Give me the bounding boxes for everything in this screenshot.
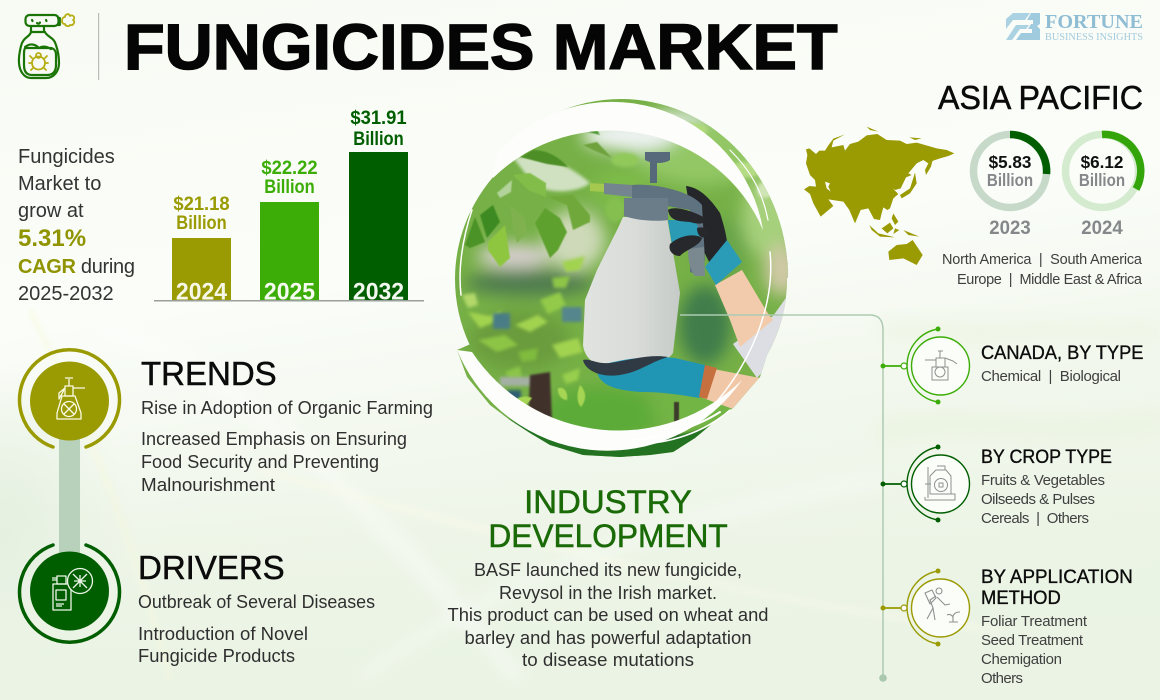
segment text: by application method: BY APPLICATION bbox=[981, 567, 1133, 588]
bar 2024: Billion bbox=[176, 212, 227, 233]
sleeve bbox=[733, 295, 788, 378]
bar 2024: $21.18 bbox=[173, 193, 230, 214]
dark blue background patches bbox=[493, 307, 582, 404]
CAGR text block: 5.31% bbox=[18, 225, 86, 252]
segment icon: by application method bbox=[880, 568, 970, 646]
segment icon: by type bbox=[880, 326, 970, 404]
donut: 2023: $5.83 bbox=[989, 152, 1032, 172]
icon: trends circle bbox=[19, 350, 119, 447]
section: drivers: DRIVERS bbox=[138, 549, 285, 586]
CAGR text block: Market to bbox=[18, 173, 101, 195]
bar 2032 bbox=[349, 107, 408, 305]
section: industry development bbox=[448, 484, 768, 670]
logo: Fortune Business Insights: BUSINESS INSIGHTS bbox=[1045, 32, 1143, 43]
section: drivers: Introduction of Novel bbox=[138, 624, 308, 644]
lower glove bbox=[597, 357, 705, 398]
segment text: by application method: Others bbox=[981, 670, 1023, 687]
bottle bbox=[583, 217, 680, 364]
segment text: by type: Chemical | Biological bbox=[981, 368, 1121, 385]
CAGR text block: CAGR during bbox=[18, 256, 135, 278]
segment icon: by crop type bbox=[880, 444, 970, 522]
upper arm bbox=[715, 270, 773, 347]
bar 2025 bbox=[260, 157, 319, 305]
header divider bbox=[98, 13, 99, 80]
trunk bbox=[528, 370, 554, 418]
donut: 2024: $6.12 bbox=[1081, 152, 1124, 172]
segment text: by crop type bbox=[981, 445, 1112, 527]
upper glove bbox=[686, 186, 727, 266]
donut: 2024: Billion bbox=[1079, 170, 1125, 190]
logo: Fortune Business Insights bbox=[1006, 11, 1143, 43]
bar 2025: 2025 bbox=[264, 278, 315, 305]
map: Asia Pacific bbox=[804, 127, 954, 265]
other regions text bbox=[942, 252, 1143, 288]
section: industry development: BASF launched its new fungicide, bbox=[474, 560, 742, 580]
section: trends: TRENDS bbox=[141, 355, 277, 392]
CAGR text block: 2025-2032 bbox=[18, 283, 114, 305]
connector line bbox=[680, 315, 883, 678]
icon: drivers circle bbox=[19, 545, 119, 642]
section: industry development: barley and has powerful adaptation bbox=[464, 628, 752, 648]
lower arm bbox=[703, 367, 760, 409]
section: trends: Increased Emphasis on Ensuring bbox=[141, 429, 407, 449]
section: industry development: DEVELOPMENT bbox=[488, 518, 728, 554]
CAGR text block: grow at bbox=[18, 200, 84, 222]
section: drivers: Fungicide Products bbox=[138, 646, 295, 666]
section: drivers: Outbreak of Several Diseases bbox=[138, 592, 375, 612]
section: industry development: INDUSTRY bbox=[524, 484, 692, 520]
bar 2032: $31.91 bbox=[350, 107, 407, 128]
donut: 2023: Billion bbox=[987, 170, 1033, 190]
donut: 2024 bbox=[1066, 134, 1141, 238]
bar 2032: 2032 bbox=[353, 278, 404, 305]
donut: 2023: 2023 bbox=[989, 217, 1031, 238]
leaves bbox=[464, 131, 612, 268]
segment text: by application method: METHOD bbox=[981, 587, 1061, 608]
title: FUNGICIDES MARKET bbox=[124, 11, 838, 83]
icon: spray bottle with bug logo bbox=[19, 14, 74, 78]
bar 2032: Billion bbox=[353, 128, 404, 149]
segment text: by application method: Foliar Treatment bbox=[981, 613, 1088, 630]
section: trends bbox=[141, 355, 433, 495]
other regions text: Europe | Middle East & Africa bbox=[957, 272, 1143, 288]
spray mist bbox=[513, 156, 590, 191]
bar 2024: 2024 bbox=[176, 278, 227, 305]
segment text: by type: CANADA, BY TYPE bbox=[981, 342, 1143, 363]
section: industry development: to disease mutations bbox=[522, 650, 694, 670]
other regions text: North America | South America bbox=[942, 252, 1143, 268]
section: industry development: This product can be used on wheat and bbox=[448, 605, 768, 625]
segment text: by application method: Seed Treatment bbox=[981, 632, 1084, 649]
section: trends: Rise in Adoption of Organic Farming bbox=[141, 398, 433, 418]
heading: Asia Pacific: ASIA PACIFIC bbox=[938, 79, 1143, 116]
CAGR text block bbox=[18, 146, 135, 305]
photo: hands holding spray bottle bbox=[450, 95, 800, 470]
bar 2025: Billion bbox=[264, 176, 315, 197]
segment text: by crop type: Cereals | Others bbox=[981, 510, 1089, 527]
segment text: by type bbox=[981, 342, 1143, 385]
logo: Fortune Business Insights: FORTUNE bbox=[1045, 11, 1143, 33]
bar chart bbox=[154, 107, 424, 305]
segment text: by application method: Chemigation bbox=[981, 651, 1062, 668]
photo ring: white brush crescents bbox=[457, 102, 771, 451]
segment text: by application method bbox=[981, 567, 1133, 687]
donut: 2023 bbox=[974, 134, 1047, 238]
section: trends: Malnourishment bbox=[141, 475, 275, 495]
donut: 2024: 2024 bbox=[1081, 217, 1123, 238]
segment text: by crop type: Oilseeds & Pulses bbox=[981, 491, 1095, 508]
section: drivers bbox=[138, 549, 375, 666]
connector: trends to drivers bbox=[59, 438, 80, 554]
bar 2024 bbox=[172, 193, 231, 305]
section: industry development: Revysol in the Irish market. bbox=[499, 583, 717, 603]
section: trends: Food Security and Preventing bbox=[141, 452, 379, 472]
bar 2025: $22.22 bbox=[261, 157, 318, 178]
segment text: by crop type: Fruits & Vegetables bbox=[981, 472, 1105, 489]
spray head bbox=[650, 162, 657, 183]
lower leaves bbox=[517, 385, 586, 407]
blurred foliage bbox=[462, 123, 773, 401]
CAGR text block: Fungicides bbox=[18, 146, 115, 168]
gripping fingers bbox=[668, 220, 698, 243]
segment text: by crop type: BY CROP TYPE bbox=[981, 445, 1112, 467]
